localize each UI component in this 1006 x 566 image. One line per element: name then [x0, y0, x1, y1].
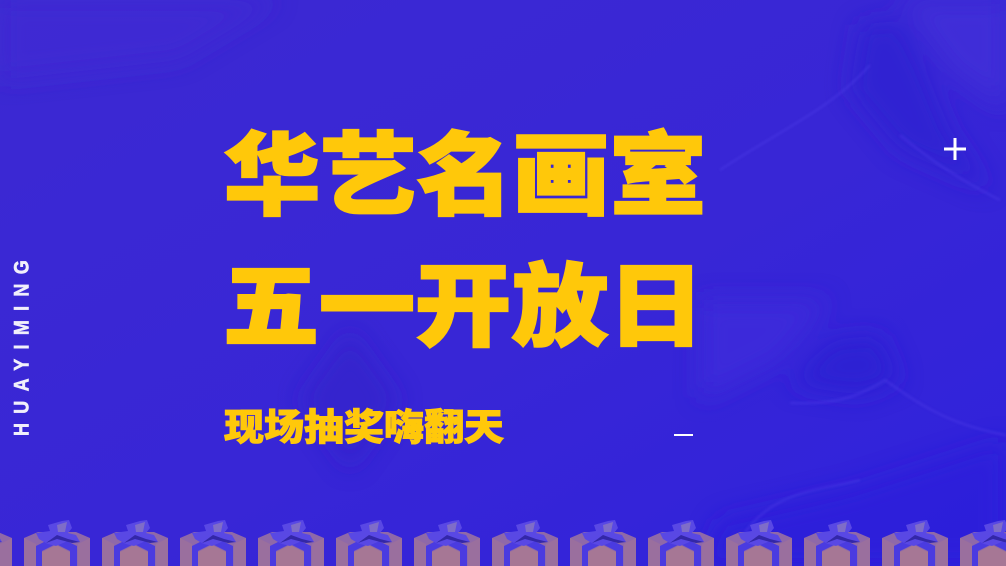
title line 1: 室 — [610, 126, 706, 226]
title line 2: 一 — [319, 257, 415, 357]
subtitle: 现场抽奖嗨翻天 — [224, 408, 504, 448]
title line 2: 开 — [415, 257, 511, 357]
title line 2: 日 — [608, 257, 704, 357]
title line 2: 五 — [223, 257, 319, 357]
title line 2: 放 — [512, 257, 608, 357]
gift box row — [0, 520, 1006, 566]
title line 1: 华 — [224, 126, 320, 226]
icon: minus sign — [674, 434, 693, 436]
title line 1 — [224, 126, 706, 226]
icon: plus sign — [944, 138, 966, 160]
title line 1: 名 — [417, 126, 513, 226]
title line 1: 画 — [513, 126, 609, 226]
title line 2 — [223, 257, 704, 357]
title line 1: 艺 — [320, 126, 416, 226]
